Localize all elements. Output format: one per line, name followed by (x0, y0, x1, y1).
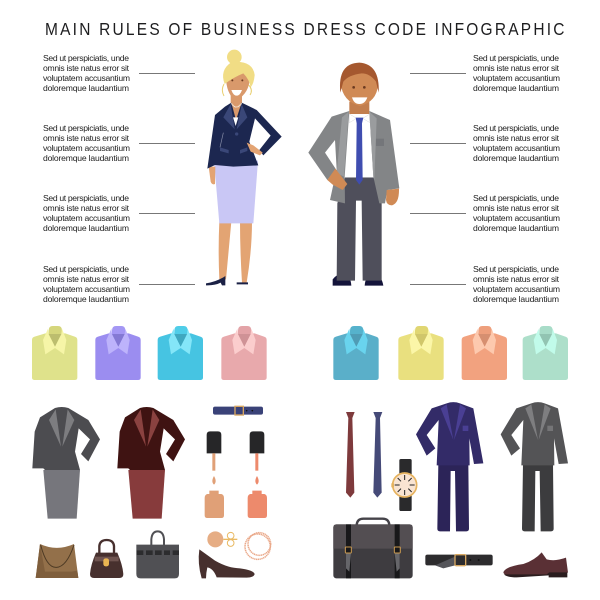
belt: black (425, 555, 493, 568)
text block: right 4: doloremque laudantium (473, 294, 559, 304)
shirt: mint (523, 326, 568, 380)
neck (349, 102, 369, 118)
text block: left 2: doloremque laudantium (43, 153, 129, 163)
watch (391, 459, 417, 511)
shirt (233, 117, 238, 126)
text block: right 3: voluptatem accusantium (473, 213, 560, 223)
briefcase (333, 519, 413, 578)
text block: left 3: omnis iste natus error sit (43, 203, 130, 213)
bag: grey tote (136, 531, 179, 578)
text block: left 3: doloremque laudantium (43, 223, 129, 233)
button (235, 132, 238, 136)
legs (219, 222, 252, 283)
text block: left 2: Sed ut perspiciatis, unde (43, 123, 129, 133)
shirt (345, 114, 373, 177)
bun (227, 50, 242, 64)
figure: man (308, 63, 399, 286)
pockets (220, 147, 247, 154)
text block: right 4: voluptatem accusantium (473, 284, 560, 294)
text block: right 4: Sed ut perspiciatis, unde (473, 264, 559, 274)
shirt: purple (95, 326, 141, 380)
text block: right 2: voluptatem accusantium (473, 143, 560, 153)
text block: left 3: Sed ut perspiciatis, unde (43, 193, 129, 203)
shoes (206, 276, 248, 285)
text block: left 1: Sed ut perspiciatis, unde (43, 53, 129, 63)
text block: left 3: voluptatem accusantium (43, 213, 130, 223)
pocket (376, 139, 384, 146)
text block: right 2: Sed ut perspiciatis, unde (473, 123, 559, 133)
leader lines (139, 74, 466, 284)
collar (349, 114, 370, 123)
suit: navy (416, 402, 483, 531)
pearl bracelet (245, 533, 271, 559)
jacket right lapel (369, 112, 377, 180)
neck and chest (231, 90, 242, 120)
eyes (231, 79, 233, 81)
skirt suit: burgundy (117, 407, 185, 519)
face (226, 71, 250, 99)
text block: right 3: Sed ut perspiciatis, unde (473, 193, 559, 203)
shoes (333, 274, 383, 286)
skirt suit: grey (32, 407, 100, 519)
shirt: teal (333, 326, 379, 380)
tie: red (346, 412, 355, 498)
waist hand (247, 143, 263, 155)
left hand (209, 167, 215, 184)
face (341, 70, 378, 106)
right text column (473, 53, 560, 304)
shirt: yellow (32, 326, 77, 380)
text block: right 2: doloremque laudantium (473, 153, 559, 163)
eyes (352, 86, 355, 89)
text block: right 4: omnis iste natus error sit (473, 274, 560, 284)
jacket right (369, 111, 399, 203)
text block: right 3: omnis iste natus error sit (473, 203, 560, 213)
text block: left 4: doloremque laudantium (43, 294, 129, 304)
shirt: pink (221, 326, 267, 380)
left text column (43, 53, 130, 304)
smile (352, 97, 367, 104)
text block: left 1: doloremque laudantium (43, 83, 129, 93)
hair (223, 62, 255, 87)
right items (333, 326, 568, 578)
trousers (337, 177, 382, 281)
text block: left 1: omnis iste natus error sit (43, 63, 130, 73)
shirt: orange (462, 326, 507, 380)
nail polish 1 (205, 431, 224, 518)
text block: left 2: voluptatem accusantium (43, 143, 130, 153)
earring (207, 531, 237, 547)
text block: right 2: omnis iste natus error sit (473, 133, 560, 143)
shirt: blue (158, 326, 203, 380)
text block: left 4: Sed ut perspiciatis, unde (43, 264, 129, 274)
jacket left lapel (337, 112, 349, 177)
title: MAIN RULES OF BUSINESS DRESS CODE INFOGRAPHIC (45, 19, 564, 39)
shirt: yellow (398, 326, 444, 380)
text block: right 1: voluptatem accusantium (473, 73, 560, 83)
text block: left 4: omnis iste natus error sit (43, 274, 130, 284)
text block: left 4: voluptatem accusantium (43, 284, 130, 294)
jacket (207, 103, 282, 169)
lapels (223, 104, 247, 129)
tie: navy (373, 412, 382, 498)
figure: woman (206, 50, 282, 285)
text block: left 2: omnis iste natus error sit (43, 133, 130, 143)
suit: black (501, 402, 568, 531)
tie (356, 118, 363, 185)
shoe: brown (503, 552, 568, 577)
shoe: heel (199, 549, 255, 578)
text block: right 1: doloremque laudantium (473, 83, 559, 93)
hands (327, 169, 399, 205)
nail polish 2 (248, 431, 267, 518)
curls (222, 84, 251, 96)
jacket left (308, 111, 349, 203)
text block: right 1: omnis iste natus error sit (473, 63, 560, 73)
text block: left 1: voluptatem accusantium (43, 73, 130, 83)
necklace (231, 103, 242, 107)
belt: blue (213, 406, 263, 415)
bag: brown (36, 544, 78, 578)
skirt (214, 161, 258, 223)
hair (340, 63, 379, 93)
text block: right 1: Sed ut perspiciatis, unde (473, 53, 559, 63)
bag: dark handbag (90, 540, 123, 578)
smile (231, 90, 242, 96)
jacket highlight (220, 133, 223, 147)
text block: right 3: doloremque laudantium (473, 223, 559, 233)
left items (32, 326, 271, 578)
